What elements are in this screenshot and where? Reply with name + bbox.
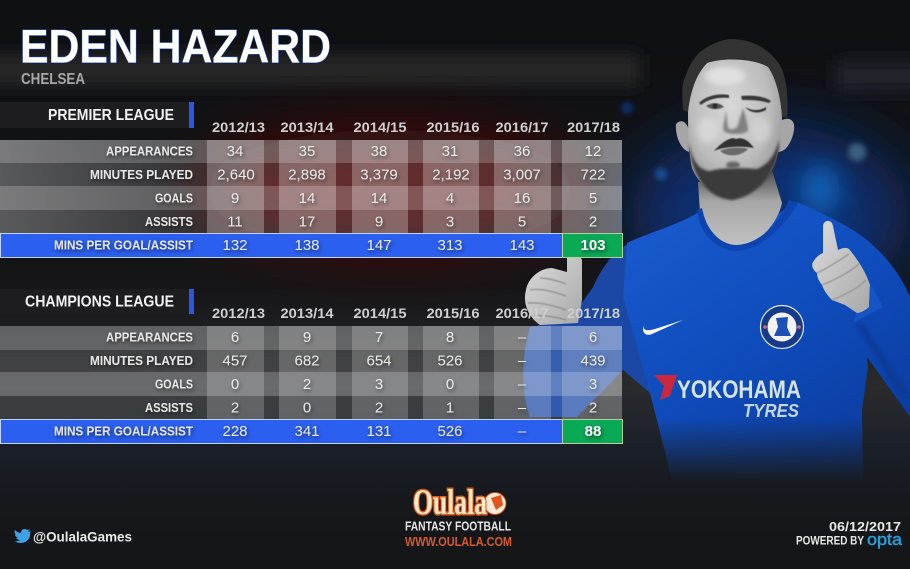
values: –: [518, 376, 527, 393]
values: 457: [222, 352, 248, 370]
footer: Oulala logo: WWW.OULALA.COM: [405, 535, 512, 549]
icon: football: [484, 492, 506, 514]
footer: date and data credit: POWERED BY: [796, 536, 864, 548]
season headers: 2016/17: [496, 120, 548, 135]
values: 34: [227, 143, 243, 160]
section heading: CHAMPIONS LEAGUE: [25, 294, 174, 310]
values: 6: [231, 329, 239, 346]
values: 439: [580, 352, 606, 370]
row bands: [0, 140, 622, 233]
row labels: APPEARANCES: [106, 330, 193, 344]
values: 38: [371, 143, 387, 160]
values: 17: [299, 214, 315, 230]
values: 2,640: [217, 166, 255, 184]
values: 35: [299, 143, 315, 160]
row labels: APPEARANCES: [106, 144, 193, 158]
highlight row: [0, 420, 622, 444]
values: 143: [509, 237, 535, 254]
values: 2: [589, 400, 597, 416]
icon: twitter bird: [14, 529, 31, 543]
season headers: 2013/14: [280, 120, 334, 135]
logo wordmark: Oulala: [413, 482, 487, 522]
right hand thumbs up: [812, 221, 870, 313]
footer: date and data credit: [796, 520, 903, 549]
Nike swoosh: [643, 320, 683, 335]
row labels: MINUTES PLAYED: [90, 168, 193, 182]
sponsor logo: [654, 375, 801, 421]
player left arm sleeve: [523, 243, 650, 417]
values: 2: [231, 400, 239, 416]
row labels: MINS PER GOAL/ASSIST: [54, 238, 193, 252]
values: [217, 143, 606, 254]
forehead and cheek highlights: [697, 67, 770, 143]
panel: Champions League table: [0, 289, 622, 444]
season headers: 2012/13: [212, 120, 266, 135]
values: 7: [375, 329, 383, 346]
panel: Premier League table: [0, 102, 622, 258]
eyes and brows: [699, 94, 771, 112]
values: 138: [294, 237, 320, 254]
collar: [697, 200, 798, 251]
player beard: [689, 140, 779, 200]
values: –: [518, 329, 527, 346]
player photo illustration: [523, 39, 910, 480]
right sleeve cuff: [853, 283, 883, 323]
player hair: [682, 39, 788, 118]
values: 36: [514, 143, 530, 160]
values: 131: [366, 423, 392, 440]
title: EDEN HAZARD: [20, 20, 331, 72]
values: 9: [231, 190, 239, 207]
moustache: [714, 138, 754, 151]
row labels: [54, 330, 193, 438]
values: 6: [589, 329, 597, 346]
row labels: ASSISTS: [145, 215, 193, 229]
values: 5: [589, 190, 597, 207]
row labels: GOALS: [155, 378, 193, 392]
values: 8: [446, 329, 454, 346]
values: 3: [375, 376, 383, 393]
footer: twitter handle: @OulalaGames: [33, 528, 132, 544]
shirt folds: [860, 325, 905, 395]
chin patch: [726, 162, 740, 168]
row labels: [54, 144, 193, 252]
values: 14: [299, 190, 315, 207]
values: –: [518, 400, 527, 416]
values: 2,898: [288, 166, 326, 184]
player neck: [698, 170, 782, 247]
values: 722: [580, 166, 606, 184]
values: 2,192: [432, 166, 470, 184]
season headers: 2012/13: [212, 306, 266, 321]
values: 2: [375, 400, 383, 416]
values: 2: [589, 214, 597, 230]
values: 132: [222, 237, 248, 254]
player shirt and right sleeve: [623, 202, 910, 480]
season headers: 2017/18: [567, 120, 621, 135]
left hand thumbs up: [525, 255, 582, 325]
row labels: GOALS: [155, 192, 193, 206]
values: 526: [437, 423, 463, 440]
row labels: MINUTES PLAYED: [90, 354, 193, 368]
values: [222, 329, 606, 440]
mouth: [720, 148, 748, 155]
season headers: [212, 120, 621, 135]
values: 11: [227, 214, 243, 230]
values: 3: [446, 214, 454, 230]
values: 313: [437, 237, 463, 254]
nose: [723, 108, 748, 134]
values: 9: [375, 214, 383, 230]
row labels: MINS PER GOAL/ASSIST: [54, 424, 193, 438]
values: 147: [366, 237, 392, 254]
section heading: [0, 289, 194, 314]
season headers: [212, 306, 621, 321]
section heading: [0, 102, 194, 128]
sponsor logo: YOKOHAMA: [677, 376, 801, 404]
values: 654: [366, 352, 392, 370]
values: 16: [514, 190, 530, 207]
values: 3: [589, 376, 597, 393]
season headers: 2013/14: [280, 306, 334, 321]
values: 228: [222, 423, 248, 440]
values: –: [518, 423, 527, 440]
season headers: 2017/18: [567, 306, 621, 321]
section heading: PREMIER LEAGUE: [48, 107, 174, 124]
season headers: 2014/15: [354, 120, 407, 135]
sponsor logo: TYRES: [743, 401, 799, 421]
values: 682: [294, 352, 320, 370]
values: 3,379: [360, 166, 398, 184]
player ears: [676, 119, 794, 152]
values: 526: [437, 352, 463, 370]
row labels: ASSISTS: [145, 401, 193, 415]
footer: Oulala logo: [405, 482, 512, 549]
values: –: [518, 352, 527, 370]
values: 2: [303, 376, 311, 393]
footer: date and data credit: 06/12/2017: [829, 520, 901, 534]
footer: Oulala logo: FANTASY FOOTBALL: [405, 520, 511, 534]
values: 9: [303, 329, 311, 346]
player face: [688, 59, 782, 198]
values: 31: [442, 143, 458, 160]
values: 1: [446, 400, 454, 416]
values: 5: [518, 214, 526, 230]
Chelsea crest: [760, 306, 804, 348]
values: 0: [231, 376, 239, 393]
values: 14: [371, 190, 387, 207]
season headers: 2015/16: [426, 306, 480, 321]
subtitle: club: CHELSEA: [21, 71, 85, 88]
values: 341: [294, 423, 320, 440]
highlight row: [0, 234, 622, 258]
values: 0: [446, 376, 454, 393]
values: 88: [585, 423, 601, 440]
season headers: 2014/15: [354, 306, 407, 321]
values: 3,007: [503, 166, 541, 184]
values: 0: [303, 400, 311, 416]
season headers: 2015/16: [426, 120, 480, 135]
row bands: [0, 326, 622, 419]
season headers: 2016/17: [496, 306, 548, 321]
footer: date and data credit: opta: [867, 530, 903, 549]
values: 103: [580, 237, 606, 254]
values: 12: [585, 143, 601, 160]
values: 4: [446, 190, 454, 207]
